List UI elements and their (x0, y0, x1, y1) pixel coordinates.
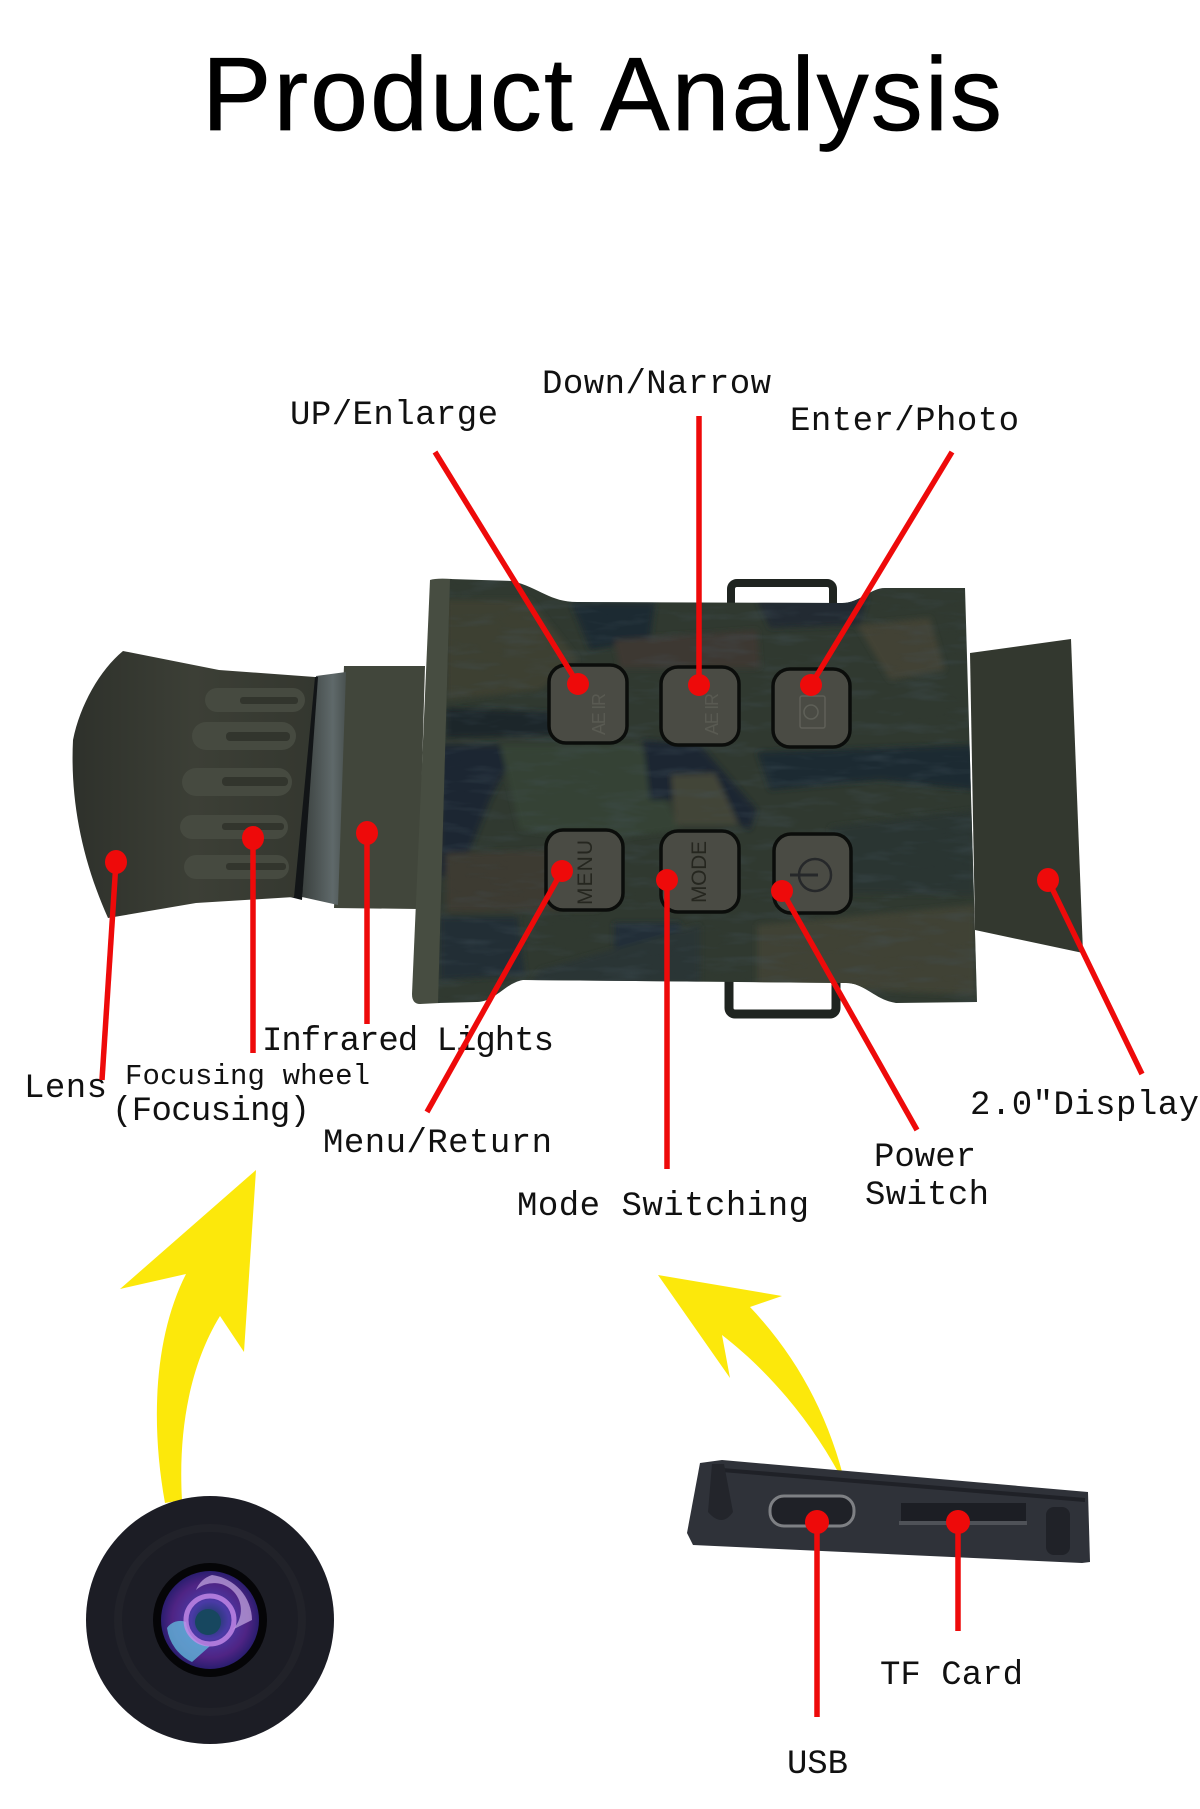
label: USB: USB (787, 1746, 848, 1784)
camouflage patches (446, 600, 578, 700)
callout line: Down/Narrow (688, 416, 710, 696)
button: down (661, 667, 739, 745)
label: Infrared Lights: Infrared Lights (262, 1023, 554, 1061)
lens front view (86, 1496, 334, 1744)
display hood (970, 639, 1083, 953)
label: Power Switch: Switch (865, 1177, 989, 1215)
infrared light housing (334, 666, 425, 909)
arrow: yellow, ports to device (658, 1275, 846, 1487)
strap loop: bottom (729, 965, 836, 1014)
callout line: Enter/Photo (800, 452, 952, 696)
callout line: Infrared Lights (356, 821, 378, 1024)
label: Mode Switching: Mode Switching (517, 1188, 809, 1226)
camouflage fine streak texture (435, 575, 980, 1005)
button: up (549, 665, 627, 743)
button: mode (661, 831, 739, 912)
callout line: USB (805, 1510, 829, 1717)
label: Down/Narrow: Down/Narrow (542, 366, 772, 404)
side slot (1046, 1507, 1070, 1555)
callout line: Display (1037, 868, 1142, 1074)
label: Focusing wheel: Focusing wheel (125, 1060, 370, 1093)
callout line: Focusing wheel (242, 826, 264, 1053)
button: mode: MODE (688, 841, 711, 903)
focusing ring (302, 672, 346, 905)
label: Power Switch: Power (874, 1139, 976, 1177)
label: (Focusing): (Focusing) (112, 1093, 310, 1131)
label: Power Switch (865, 1139, 989, 1215)
callout line: TF Card (946, 1510, 970, 1631)
callout line: UP/Enlarge (435, 452, 589, 695)
button: up: AE IR (589, 693, 609, 735)
button: menu: MENU (574, 840, 597, 905)
button: menu (546, 830, 623, 910)
button: power (774, 834, 851, 913)
label: UP/Enlarge: UP/Enlarge (290, 397, 498, 435)
USB port (770, 1496, 854, 1526)
body flange (412, 579, 452, 1004)
label: TF Card: TF Card (880, 1657, 1023, 1695)
camouflage body (435, 575, 980, 1005)
label: Lens: Lens (24, 1070, 107, 1108)
notch (708, 1464, 733, 1520)
TF card slot (899, 1503, 1027, 1525)
device: night vision monocular top view (73, 575, 1083, 1014)
title: Product Analysis (202, 37, 1002, 153)
device bottom edge with ports (687, 1460, 1090, 1563)
button: down: AE IR (702, 693, 722, 735)
focusing wheel ribs (180, 688, 305, 879)
label: Menu/Return: Menu/Return (323, 1125, 552, 1163)
button: enter (773, 669, 850, 747)
callout line: Lens (102, 850, 127, 1080)
callout line: Power Switch (771, 880, 917, 1130)
strap loop: top (731, 583, 833, 623)
eyecup lens hood with focusing wheel (73, 651, 315, 918)
label: 2.0"Display: 2.0"Display (970, 1087, 1199, 1125)
callout line: Mode Switching (656, 869, 678, 1169)
callout line: Menu/Return (427, 860, 573, 1112)
label: Enter/Photo: Enter/Photo (790, 403, 1019, 441)
arrow: yellow, lens to device (120, 1170, 256, 1503)
